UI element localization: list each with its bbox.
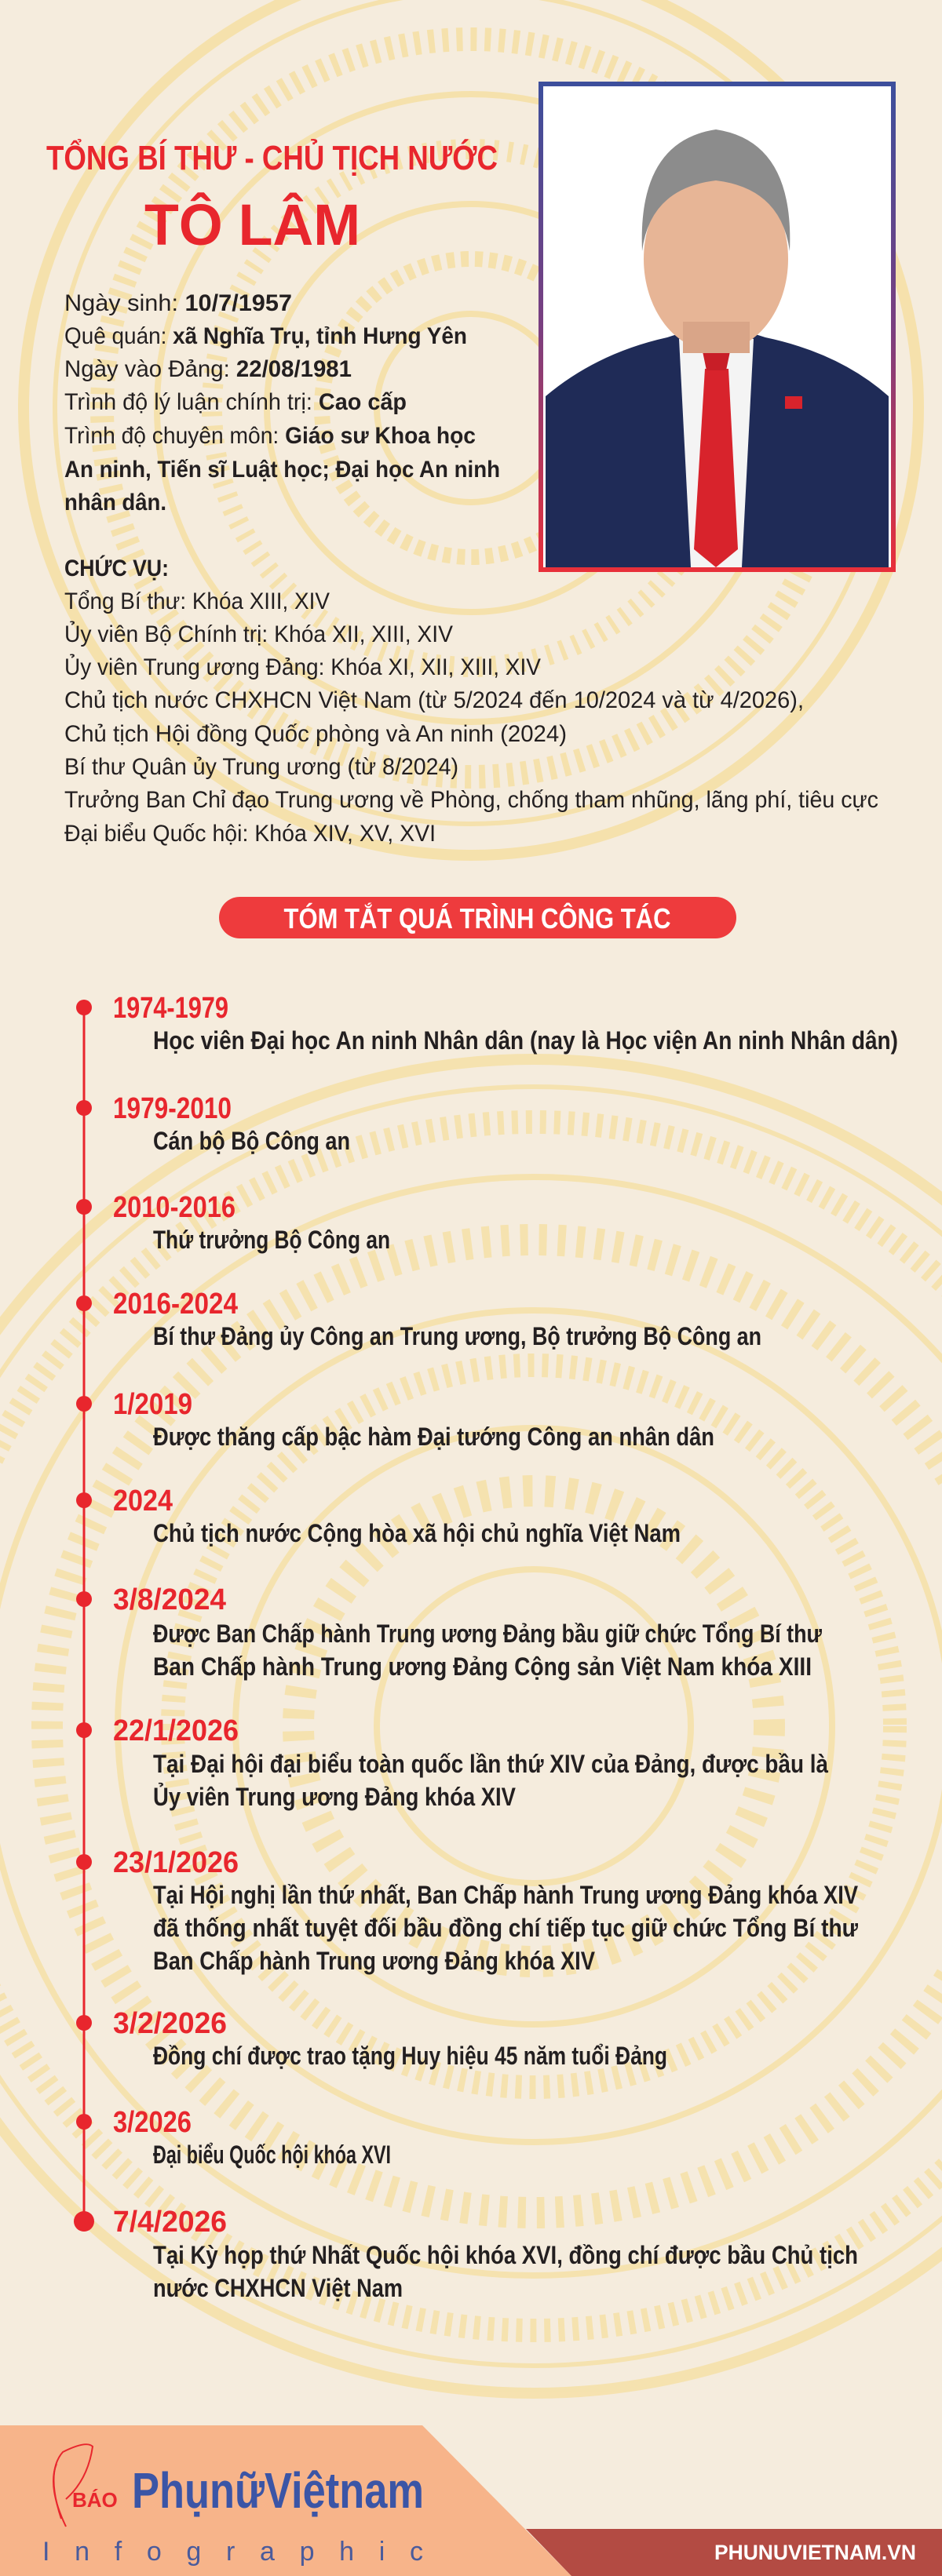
title: TÔ LÂM — [144, 192, 360, 257]
timeline entries: Ban Chấp hành Trung ương Đảng Cộng sản Việt Nam khóa XIII — [153, 1652, 812, 1681]
background pattern: bottom drum — [0, 1059, 942, 2393]
timeline entries: Đại biểu Quốc hội khóa XVI — [153, 2141, 391, 2169]
timeline entries: 2016-2024 — [113, 1288, 238, 1321]
timeline entries: 2010-2016 — [113, 1191, 236, 1224]
positions list: Tổng Bí thư: Khóa XIII, XIV — [64, 588, 330, 614]
positions list: Đại biểu Quốc hội: Khóa XIV, XV, XVI — [64, 821, 436, 847]
footer: infographic label: Infographic — [42, 2537, 423, 2567]
title — [46, 137, 498, 257]
timeline entries: 2024 — [113, 1485, 173, 1518]
timeline entries: Bí thư Đảng ủy Công an Trung ương, Bộ trưởng Bộ Công an — [153, 1322, 761, 1350]
personal info text: Trình độ chuyên môn: Giáo sư Khoa học — [64, 423, 476, 449]
timeline entries: 22/1/2026 — [113, 1714, 239, 1747]
section banner — [219, 897, 736, 938]
timeline entries: 3/8/2024 — [113, 1583, 226, 1616]
timeline entries: 23/1/2026 — [113, 1846, 239, 1879]
timeline entries: Thứ trưởng Bộ Công an — [153, 1226, 390, 1254]
personal info text: Quê quán: xã Nghĩa Trụ, tỉnh Hưng Yên — [64, 323, 467, 349]
section banner: TÓM TẮT QUÁ TRÌNH CÔNG TÁC — [284, 902, 670, 935]
timeline entries — [74, 992, 898, 2302]
positions list: Ủy viên Bộ Chính trị: Khóa XII, XIII, XIV — [64, 621, 453, 647]
title: TỔNG BÍ THƯ - CHỦ TỊCH NƯỚC — [46, 137, 498, 177]
timeline entries: Cán bộ Bộ Công an — [153, 1127, 350, 1155]
timeline entries: Đồng chí được trao tặng Huy hiệu 45 năm tuổi Đảng — [153, 2042, 667, 2070]
portrait photo — [541, 84, 893, 570]
positions list: Chủ tịch Hội đồng Quốc phòng và An ninh (2024) — [64, 721, 567, 747]
timeline entries: Được thăng cấp bậc hàm Đại tướng Công an nhân dân — [153, 1423, 714, 1451]
footer: logo: BÁO — [72, 2488, 118, 2512]
positions list: Bí thư Quân ủy Trung ương (từ 8/2024) — [64, 754, 458, 780]
timeline entries: Ủy viên Trung ương Đảng khóa XIV — [153, 1783, 517, 1811]
timeline entries: 1/2019 — [113, 1388, 192, 1421]
personal info text: Ngày vào Đảng: 22/08/1981 — [64, 356, 352, 382]
positions list — [64, 555, 878, 847]
timeline entries: 7/4/2026 — [113, 2206, 227, 2239]
personal info text: nhân dân. — [64, 490, 166, 516]
timeline entries: Ban Chấp hành Trung ương Đảng khóa XIV — [153, 1947, 596, 1975]
personal info text: Trình độ lý luận chính trị: Cao cấp — [64, 389, 407, 415]
personal info text: An ninh, Tiến sĩ Luật học; Đại học An ninh — [64, 457, 500, 483]
positions list: Ủy viên Trung ương Đảng: Khóa XI, XII, XIII, XIV — [64, 654, 541, 680]
personal info text: Ngày sinh: 10/7/1957 — [64, 290, 292, 316]
timeline entries: Được Ban Chấp hành Trung ương Đảng bầu giữ chức Tổng Bí thư — [153, 1620, 823, 1648]
timeline entries: 3/2/2026 — [113, 2007, 227, 2040]
timeline entries: 1974-1979 — [113, 992, 228, 1025]
timeline entries: Chủ tịch nước Cộng hòa xã hội chủ nghĩa Việt Nam — [153, 1519, 681, 1547]
timeline entries: 3/2026 — [113, 2106, 192, 2139]
timeline entries: đã thống nhất tuyệt đối bầu đồng chí tiếp tục giữ chức Tổng Bí thư — [153, 1914, 859, 1942]
positions list: CHỨC VỤ: — [64, 555, 169, 581]
timeline entries: nước CHXHCN Việt Nam — [153, 2274, 403, 2302]
footer: logo — [53, 2444, 424, 2527]
footer: website bar: PHUNUVIETNAM.VN — [714, 2541, 916, 2564]
background pattern: top drum — [24, 0, 918, 855]
timeline entries: Tại Đại hội đại biểu toàn quốc lần thứ XIV của Đảng, được bầu là — [153, 1750, 828, 1778]
positions list: Chủ tịch nước CHXHCN Việt Nam (từ 5/2024 đến 10/2024 và từ 4/2026), — [64, 687, 804, 713]
personal info text — [64, 290, 500, 516]
footer: logo: PhụnữViệtnam — [132, 2462, 424, 2519]
positions list: Trưởng Ban Chỉ đạo Trung ương về Phòng, chống tham nhũng, lãng phí, tiêu cực — [64, 787, 878, 813]
footer: orange logo panel — [0, 2425, 571, 2576]
timeline line — [83, 1004, 85, 2221]
timeline entries: 1979-2010 — [113, 1092, 232, 1125]
footer: website bar — [526, 2529, 942, 2576]
